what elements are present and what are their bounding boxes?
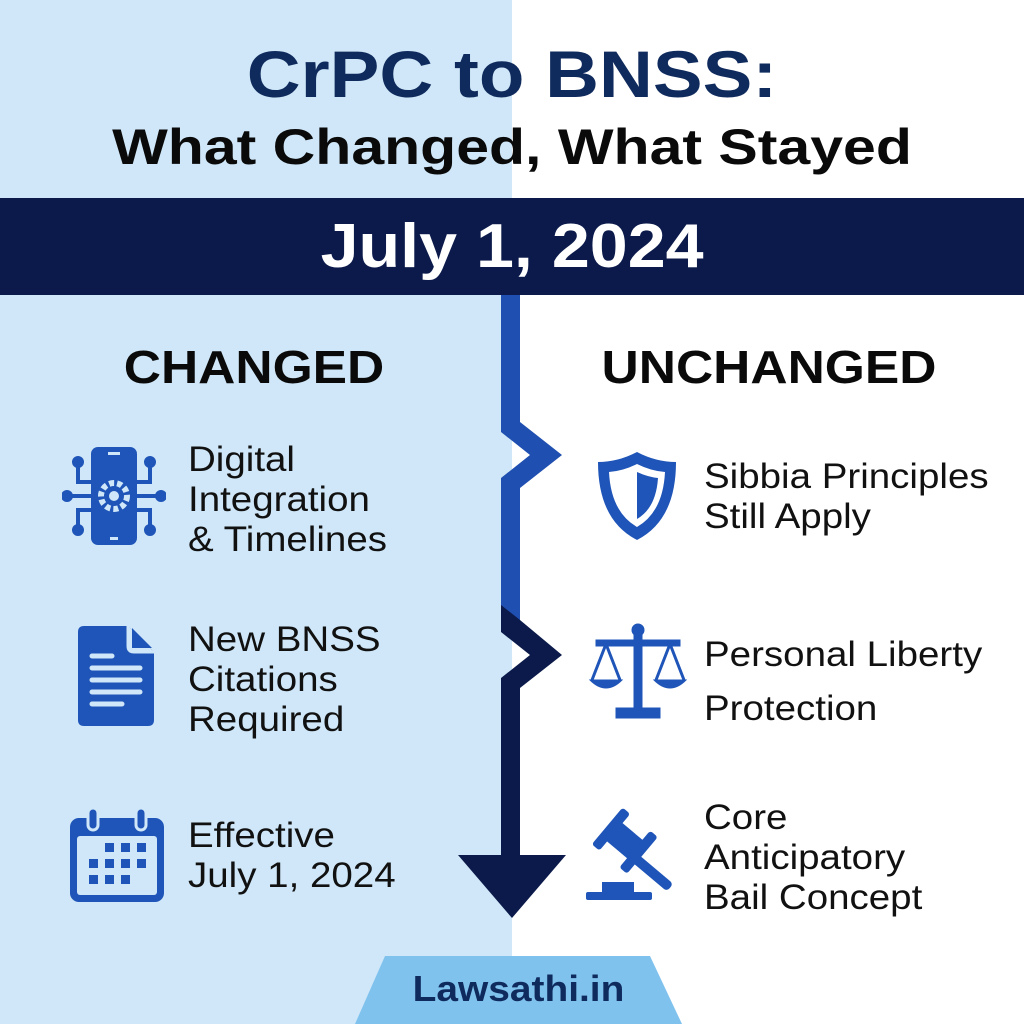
subtitle: What Changed, What Stayed <box>112 119 912 175</box>
text: digital: Integration <box>188 480 370 519</box>
text: liberty: Protection <box>704 689 877 728</box>
text: core: Anticipatory <box>704 838 905 877</box>
icon: calendar <box>70 810 164 902</box>
text: liberty <box>704 635 982 728</box>
icon: scales <box>588 624 688 718</box>
text: digital: & Timelines <box>188 520 387 559</box>
text: core: Core <box>704 798 787 837</box>
text: citations: New BNSS <box>188 620 381 659</box>
title: CrPC to BNSS: <box>247 37 777 111</box>
text: digital <box>188 440 387 559</box>
text: citations <box>188 620 381 739</box>
text: effective: July 1, 2024 <box>188 856 396 895</box>
text: core <box>704 798 922 917</box>
text: sibbia: Still Apply <box>704 497 871 536</box>
footer: Lawsathi.in <box>413 968 624 1009</box>
text: effective: Effective <box>188 816 335 855</box>
icon: gavel <box>586 808 672 900</box>
date banner <box>0 198 1024 295</box>
text: citations: Required <box>188 700 344 739</box>
icon: document <box>78 626 154 726</box>
heading: unchanged: UNCHANGED <box>602 341 936 393</box>
heading: changed: CHANGED <box>124 341 384 393</box>
text: liberty: Personal Liberty <box>704 635 982 674</box>
text: citations: Citations <box>188 660 338 699</box>
text: sibbia <box>704 457 989 536</box>
text: digital: Digital <box>188 440 295 479</box>
text: sibbia: Sibbia Principles <box>704 457 989 496</box>
icon: shield <box>598 452 676 540</box>
icon: phone <box>62 447 166 545</box>
text: effective <box>188 816 396 895</box>
date banner: July 1, 2024 <box>321 212 703 281</box>
text: core: Bail Concept <box>704 878 922 917</box>
